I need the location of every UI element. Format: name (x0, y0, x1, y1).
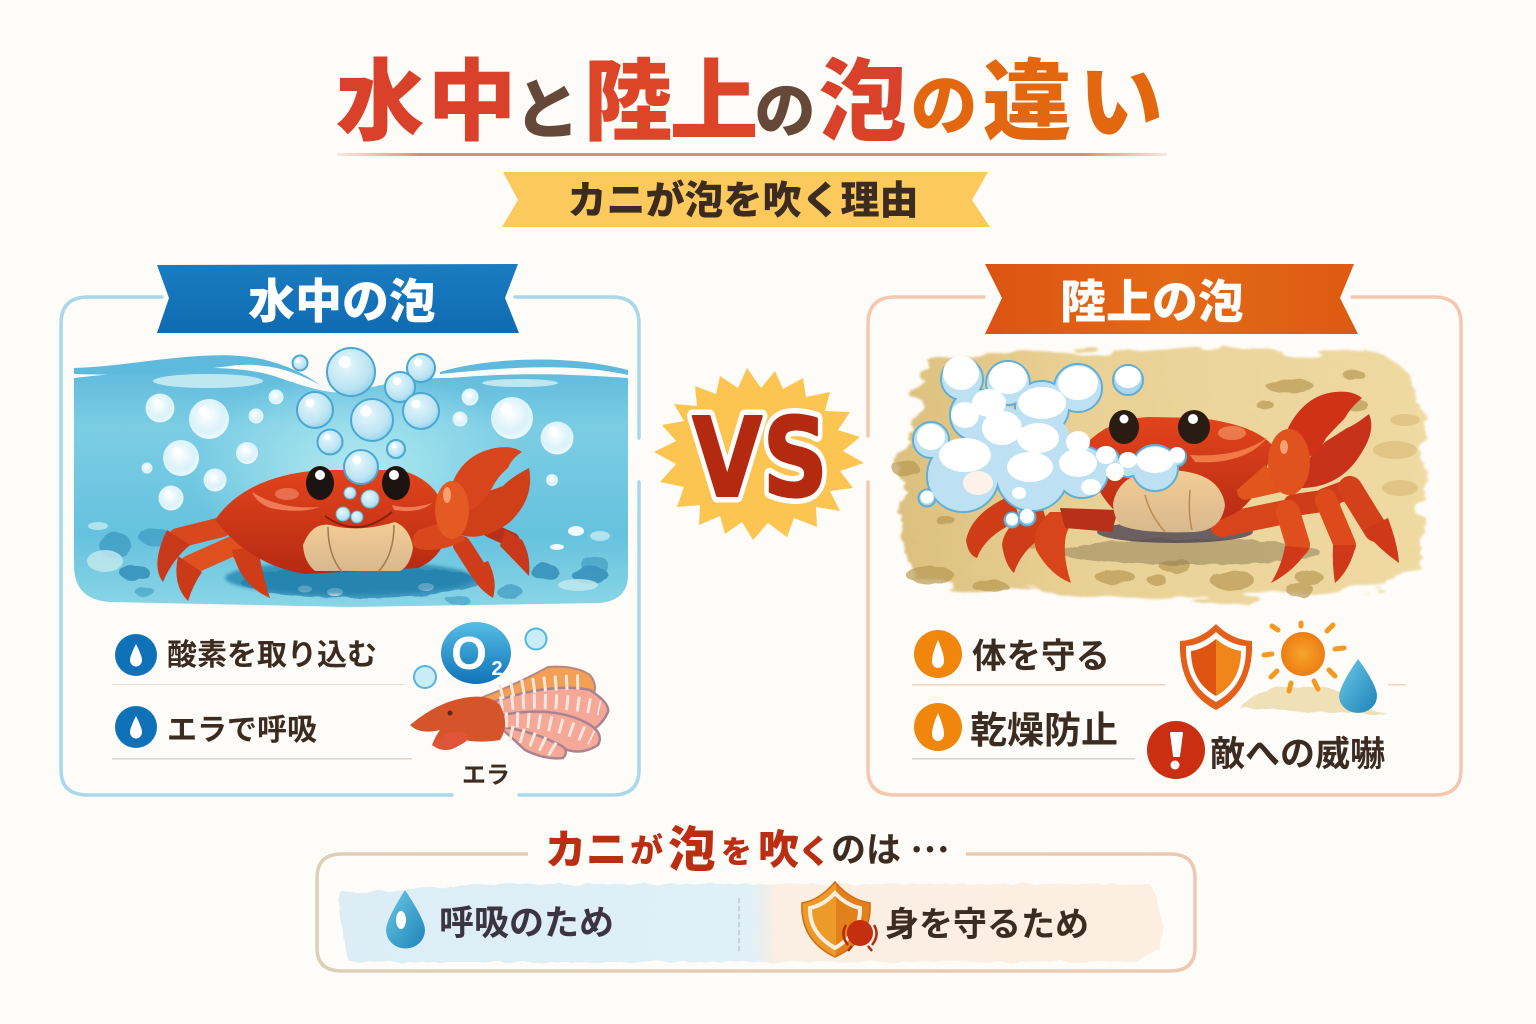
item: breathing (386, 890, 614, 948)
crab shadow (225, 561, 475, 595)
conclusion heading: カニ (545, 816, 627, 876)
crab: on land (966, 392, 1399, 583)
subtitle ribbon: カニが泡を吹く理由 (567, 170, 919, 226)
right legs (462, 530, 529, 598)
icon: O2 bubble: 2 (491, 658, 503, 680)
right legs (1222, 488, 1399, 583)
text: threat to enemies: 敵への威嚇 (1210, 726, 1385, 777)
illustration: gills (410, 667, 608, 758)
bubble above the crab (344, 450, 378, 484)
left legs (966, 495, 1118, 583)
crab eyes (306, 466, 410, 500)
banner: land heading (985, 264, 1358, 334)
VS burst (654, 368, 864, 540)
conclusion heading (545, 810, 950, 880)
icon: O2 bubble (414, 622, 546, 688)
banner: land heading: 陸上の泡 (1060, 266, 1244, 332)
panel frame: conclusion (317, 854, 1195, 971)
icon: O2 bubble: O (451, 627, 487, 679)
crab eyes (1109, 410, 1210, 444)
left legs (157, 525, 288, 601)
bullet: protect body: 体を守る (972, 628, 1110, 678)
conclusion heading: 泡 (668, 810, 716, 880)
crab: underwater (157, 447, 530, 601)
carapace (215, 470, 448, 574)
bubbles rising (142, 388, 574, 510)
crab mouth (325, 512, 392, 527)
water scene (74, 355, 628, 607)
conclusion heading: が (630, 824, 663, 872)
bullet: prevent drying: 乾燥防止 (970, 700, 1118, 754)
panel frame: land (868, 297, 1461, 795)
icon: small crab (843, 920, 877, 951)
panel: conclusion (317, 810, 1195, 971)
illustration: crab foaming on sand (891, 352, 1425, 600)
VS burst: VS (692, 394, 828, 522)
icon: sun (1264, 623, 1344, 691)
crab claw (1237, 392, 1371, 500)
title: の (754, 61, 816, 150)
item: protecting body (802, 882, 1089, 957)
item: breathing: 呼吸のため (439, 895, 614, 946)
panel: underwater bubbles (61, 263, 639, 795)
title: 中 (428, 30, 516, 159)
title: 違 (982, 30, 1072, 159)
banner: underwater heading (157, 263, 519, 333)
title (336, 30, 1163, 159)
title underline (337, 153, 1167, 156)
conclusion heading: のは (831, 822, 901, 873)
conclusion heading: 吹 (758, 816, 799, 876)
VS burst: VS (692, 394, 828, 522)
panel frame: underwater (61, 297, 639, 795)
icon: sand strip (1240, 687, 1388, 714)
panel: on-land foam (868, 264, 1461, 795)
crab belly (1113, 470, 1225, 532)
title: の (910, 52, 978, 149)
face bubbles (336, 487, 379, 523)
bullet: gills: エラで呼吸 (167, 705, 317, 749)
bullet: oxygen: 酸素を取り込む (167, 630, 377, 674)
illustration: crab blowing bubbles underwater (74, 348, 628, 607)
title: 上 (670, 30, 758, 159)
label: gills: エラ (462, 755, 510, 790)
conclusion heading: く (798, 825, 831, 873)
title: 水 (336, 30, 424, 159)
item: protecting body: 身を守るため (885, 897, 1089, 946)
foam cloud (913, 356, 1186, 528)
icon: warning (1147, 721, 1205, 779)
title: 陸 (584, 30, 672, 159)
icon: shield (1180, 624, 1252, 710)
icon: water drop (1339, 659, 1377, 713)
conclusion heading: … (910, 818, 950, 876)
title: 泡 (818, 30, 908, 159)
divider (738, 898, 740, 952)
title: い (1079, 36, 1163, 157)
banner: underwater heading: 水中の泡 (248, 263, 436, 332)
sand ground (891, 352, 1425, 600)
carapace (1085, 417, 1272, 530)
crab claw (412, 447, 530, 550)
band: breathing and protection (340, 884, 1162, 962)
conclusion heading: を (721, 827, 752, 872)
crab belly (303, 522, 413, 571)
title: と (514, 57, 580, 153)
